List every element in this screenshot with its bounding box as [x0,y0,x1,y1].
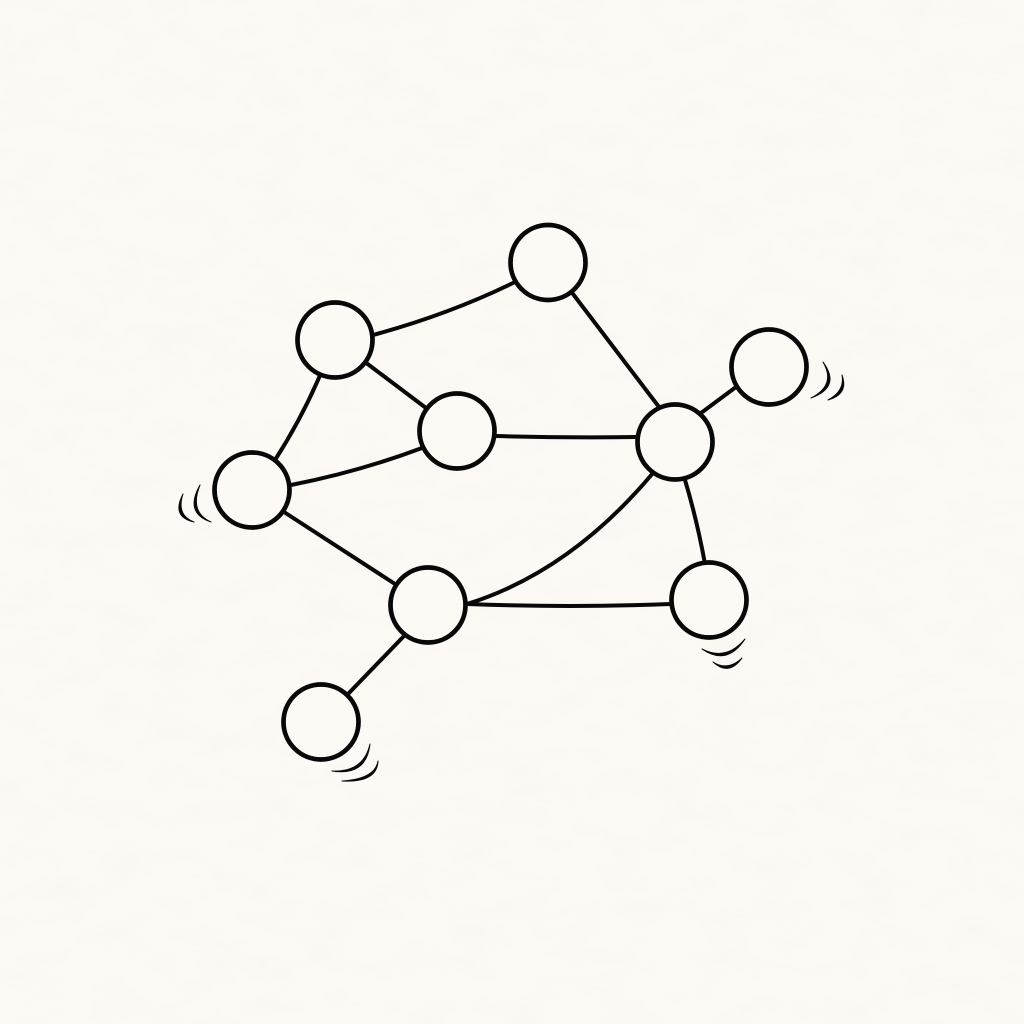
edge: hub to lower-center node [467,473,653,604]
motion marks: left node [179,485,211,522]
motion marks: right node [811,362,844,400]
node: lower-center [390,568,466,642]
node: center [420,394,494,468]
edge: left node to lower-center node [284,512,395,584]
edge: hub to lower-right node [685,480,705,564]
node: right [732,330,806,404]
node: top [510,225,586,300]
motion marks: lower-right node [702,639,745,668]
edge: lower-center node to lower-right node [467,604,671,606]
node: upper-left [298,302,372,378]
edge: left node to center node [291,448,422,485]
edge: top node to hub [573,294,659,407]
edge: hub to right node [701,387,736,413]
edge: center node to hub [496,436,637,437]
node: left [214,452,290,528]
node: hub [638,404,712,480]
edge: upper-left node to center node [365,362,426,408]
motion marks: bottom node [332,744,378,781]
edge: upper-left node to left node [275,373,321,460]
node: lower-right [672,562,746,638]
node: bottom [284,684,358,760]
edge: lower-center node to bottom node [348,636,404,694]
edge: upper-left node to top node [373,282,515,335]
